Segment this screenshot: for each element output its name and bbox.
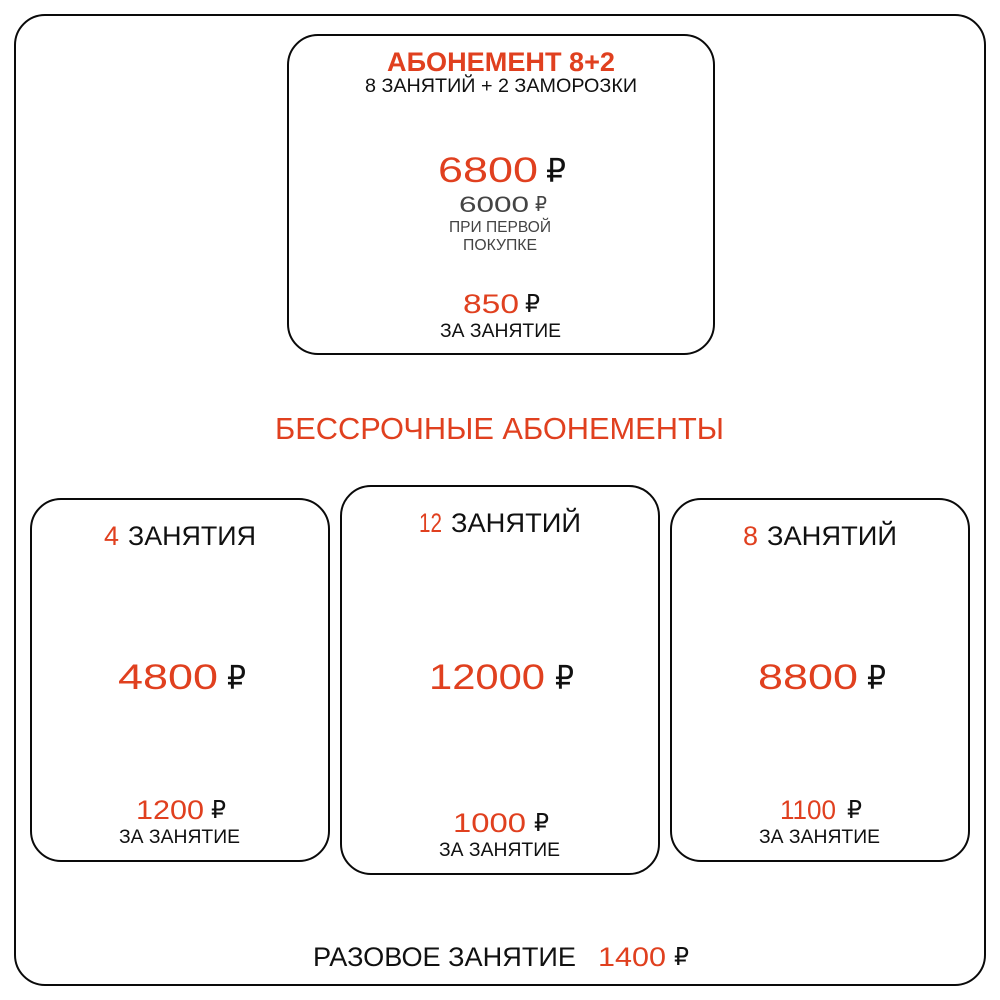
main price: ₽ <box>546 152 566 189</box>
per class label: ЗА ЗАНЯТИЕ <box>759 827 880 848</box>
price per class: ₽ <box>211 796 226 824</box>
panel: 4 classes <box>31 499 329 861</box>
price per class <box>136 795 226 825</box>
main price <box>429 658 574 697</box>
card title: АБОНЕМЕНТ 8+2 <box>387 47 615 77</box>
card outline 4 classes <box>31 499 329 861</box>
main price: 6800 <box>438 151 538 190</box>
card title: ЗАНЯТИЯ <box>128 521 256 551</box>
price per class: ₽ <box>847 796 862 824</box>
first purchase note: ПОКУПКЕ <box>463 237 537 254</box>
card outline 8+2 <box>288 35 714 354</box>
first purchase price <box>459 192 547 217</box>
card title: 8 <box>743 521 758 551</box>
panel: 12 classes <box>341 486 659 874</box>
single class price line <box>313 942 689 972</box>
first purchase note: ПРИ ПЕРВОЙ <box>449 218 551 236</box>
price per class: ₽ <box>534 809 549 837</box>
card title: ЗАНЯТИЙ <box>451 507 581 538</box>
heading: БЕССРОЧНЫЕ АБОНЕМЕНТЫ <box>275 412 724 446</box>
card title: 12 <box>419 508 442 538</box>
panel: subscription 8+2 <box>288 35 714 354</box>
panel: 8 classes <box>671 499 969 861</box>
first purchase price: 6000 <box>459 192 529 217</box>
single class price line: РАЗОВОЕ ЗАНЯТИЕ <box>313 942 576 972</box>
price per class: 1000 <box>453 808 526 838</box>
card title: ЗАНЯТИЙ <box>767 520 897 551</box>
main price <box>758 658 886 697</box>
price per class: ₽ <box>525 290 540 318</box>
main price <box>438 151 566 190</box>
main price <box>118 658 246 697</box>
main price: 4800 <box>118 658 218 697</box>
main price: ₽ <box>867 659 886 696</box>
price per class: 850 <box>463 289 519 319</box>
card title: 4 <box>104 521 119 551</box>
first purchase price: ₽ <box>535 194 547 216</box>
first purchase note <box>449 218 551 254</box>
price per class <box>463 289 540 319</box>
per class label: ЗА ЗАНЯТИЕ <box>119 827 240 848</box>
main price: ₽ <box>555 659 574 696</box>
price per class: 1200 <box>136 795 204 825</box>
per class label: ЗА ЗАНЯТИЕ <box>439 840 560 861</box>
price per class: 1100 <box>780 795 836 825</box>
card outline 12 classes <box>341 486 659 874</box>
card subtitle: 8 ЗАНЯТИЙ + 2 ЗАМОРОЗКИ <box>365 73 637 97</box>
main price: 8800 <box>758 658 858 697</box>
per class label: ЗА ЗАНЯТИЕ <box>440 321 561 342</box>
main price: 12000 <box>429 658 545 697</box>
main price: ₽ <box>227 659 246 696</box>
single class price line: ₽ <box>674 943 689 971</box>
price per class <box>453 808 549 838</box>
card outline 8 classes <box>671 499 969 861</box>
single class price line: 1400 <box>598 942 666 972</box>
